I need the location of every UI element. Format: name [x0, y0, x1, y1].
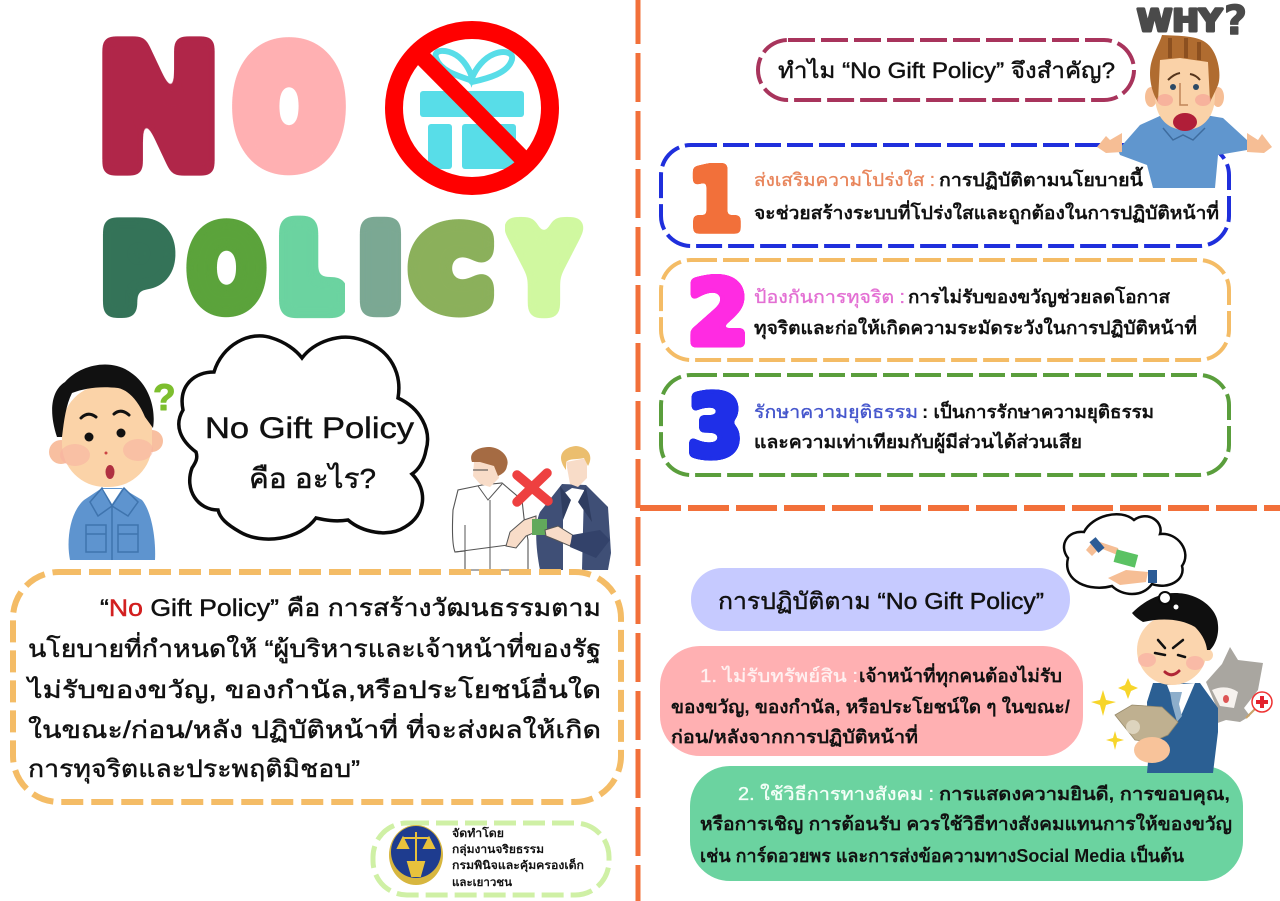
illustration: puzzled man with WHY: WHY: [1137, 4, 1223, 39]
heading: why it matters: ทำไม “No Gift Policy” จึงสำคัญ?: [778, 58, 1115, 83]
organisation credit: กลุ่มงานจริยธรรม: [452, 843, 544, 857]
panel: reason 1: [661, 145, 1229, 251]
panel: rule 1: [660, 646, 1083, 756]
heading: compliance: [691, 568, 1070, 631]
thought cloud: what is No Gift Policy: [179, 336, 428, 539]
panel: rule 1: ก่อน/หลังจากการปฏิบัติหน้าที่: [671, 724, 918, 747]
icon: organisation emblem: [389, 825, 443, 885]
icon: confused man with question mark: [49, 365, 176, 560]
panel: reason 2: การไม่รับของขวัญช่วยลดโอกาส: [908, 286, 1171, 308]
numeral 1: 1: [687, 150, 743, 251]
panel: definition: นโยบายที่กำหนดให้ “ผู้บริหารและเจ้าหน้าที่ของรัฐ: [28, 632, 601, 664]
icon: no gift prohibition sign: [394, 30, 550, 186]
panel: rule 1: 1. ไม่รับทรัพย์สิน :: [700, 665, 858, 686]
panel: reason 2: ทุจริตและก่อให้เกิดความระมัดระวังในการปฏิบัติหน้าที่: [754, 315, 1197, 340]
stack of banknotes: [1115, 705, 1178, 742]
panel: rule 2: 2. ใช้วิธีการทางสังคม :: [738, 783, 934, 804]
panel: reason 1: ส่งเสริมความโปร่งใส :: [754, 169, 935, 190]
title: POLICY: I: [360, 205, 401, 333]
organisation credit: จัดทำโดย: [452, 826, 504, 840]
thought cloud: what is No Gift Policy: คือ อะไร?: [249, 463, 376, 494]
title: POLICY: [103, 205, 577, 335]
title: POLICY: P: [103, 206, 171, 335]
panel: definition: ไม่รับของขวัญ, ของกำนัล,หรือประโยชน์อื่นใด: [26, 673, 601, 704]
panel: reason 1: จะช่วยสร้างระบบที่โปร่งใสและถูกต้องในการปฏิบัติหน้าที่: [754, 200, 1219, 225]
title: NO: O: [238, 25, 340, 194]
panel: reason 3: [661, 375, 1229, 477]
thought cloud: what is No Gift Policy: No Gift Policy: [205, 412, 414, 445]
thought bubble: cash exchange: [1064, 514, 1185, 594]
panel: definition: ในขณะ/ก่อน/หลัง ปฏิบัติหน้าที่ ที่จะส่งผลให้เกิด: [28, 713, 601, 744]
icon: green question mark: ?: [153, 377, 176, 418]
numeral 2: 2: [687, 262, 749, 366]
panel: reason 3: รักษาความยุติธรรม: [754, 402, 918, 423]
illustration: two men refusing cash gift: [452, 446, 611, 570]
panel: reason 3: และความเท่าเทียมกับผู้มีส่วนได้ส่วนเสีย: [754, 431, 1082, 454]
panel: definition: [13, 572, 621, 802]
panel: reason 2: ป้องกันการทุจริต :: [754, 287, 905, 308]
title: POLICY: O: [188, 205, 265, 334]
title: NO: [95, 10, 340, 208]
panel: definition: “No Gift Policy” คือ การสร้างวัฒนธรรมตาม: [100, 595, 601, 622]
organisation credit: [373, 823, 609, 895]
panel: reason 1: การปฏิบัติตามนโยบายนี้: [939, 166, 1144, 190]
numeral 3: 3: [687, 378, 743, 477]
title: POLICY: L: [282, 208, 339, 330]
panel: definition: การทุจริตและประพฤติมิชอบ”: [28, 756, 360, 784]
panel: rule 1: เจ้าหน้าที่ทุกคนต้องไม่รับ: [859, 663, 1062, 688]
cat: [1206, 647, 1272, 725]
organisation credit: และเยาวชน: [452, 877, 512, 889]
illustration: greedy official with money and cat: [1064, 514, 1272, 773]
heading: compliance: การปฏิบัติตาม “No Gift Policy”: [718, 588, 1044, 614]
panel: rule 1: ของขวัญ, ของกำนัล, หรือประโยชน์ใด ๆ ในขณะ/: [671, 696, 1070, 718]
panel: rule 2: เช่น การ์ดอวยพร และการส่งข้อความทางSocial Media เป็นต้น: [700, 844, 1185, 866]
sparkles: [1091, 678, 1138, 750]
icon: red cross: [517, 473, 548, 502]
title: POLICY: C: [415, 214, 488, 328]
title: POLICY: Y: [512, 206, 577, 335]
panel: rule 2: การแสดงความยินดี, การขอบคุณ,: [939, 784, 1230, 806]
panel: rule 2: [690, 766, 1243, 881]
organisation credit: กรมพินิจและคุ้มครองเด็ก: [452, 858, 584, 873]
heading: why it matters: [758, 40, 1134, 100]
illustration: puzzled man with WHY: [1097, 0, 1272, 188]
panel: rule 2: หรือการเชิญ การต้อนรับ ควรใช้วิธีทางสังคมแทนการให้ของขวัญ: [700, 813, 1232, 835]
title: NO: N: [95, 10, 222, 208]
panel: reason 2: [661, 260, 1229, 366]
icon: banknotes: [532, 519, 547, 535]
panel: reason 3: : เป็นการรักษาความยุติธรรม: [922, 400, 1154, 424]
